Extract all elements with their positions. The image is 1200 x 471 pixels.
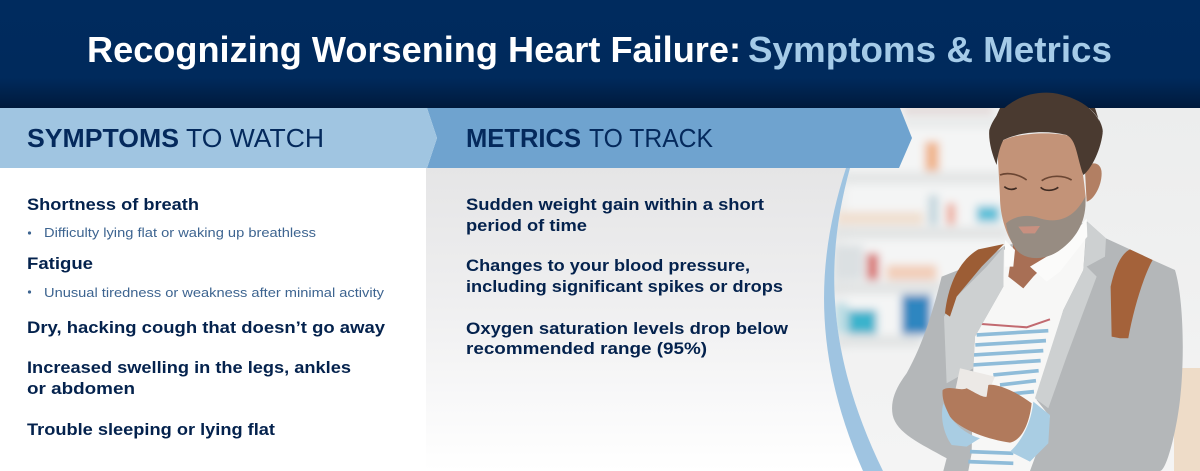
man: ear [1085,163,1102,202]
heading: symptoms to watch: SYMPTOMS [27,123,179,153]
man: backpack straps [945,244,1153,338]
man: beard [1006,197,1086,258]
metrics list: including significant spikes or drops [466,277,783,296]
title: Recognizing Worsening Heart Failure: [87,29,741,70]
man: box [955,368,995,400]
man: jacket [892,222,1183,471]
man: collar [1005,218,1087,282]
man: neck [1008,243,1060,288]
symptoms list: Shortness of breath [27,195,199,214]
metrics list: period of time [466,216,587,235]
symptoms list: Dry, hacking cough that doesn’t go away [27,318,386,337]
man: right cuff [1010,402,1050,462]
man: hair [989,92,1103,175]
metrics list: recommended range (95%) [466,339,707,358]
man: eyes and brows [1000,174,1072,190]
title: Symptoms & Metrics [748,29,1112,70]
heading: metrics to track: TO TRACK [589,123,714,153]
panel: metrics background [426,168,886,471]
metrics list: Changes to your blood pressure, [466,256,750,275]
man: mouth [1018,226,1040,233]
symptoms list: or abdomen [27,379,135,398]
heading: symptoms to watch: TO WATCH [186,123,324,153]
man: hair overlapping header [990,93,1103,133]
man: hand [942,385,1032,443]
curved accent [824,168,883,471]
photo: wooden counter [1174,368,1200,471]
symptoms list: Unusual tiredness or weakness after minimal activity [44,285,385,300]
symptoms list [27,195,386,439]
man: face [997,133,1086,257]
man: striped shirt [968,319,1050,463]
heading: metrics to track: METRICS [466,123,581,153]
title [87,29,1112,70]
metrics list: Oxygen saturation levels drop below [466,319,789,338]
banner: symptoms to watch [0,108,437,168]
man: left cuff [942,403,980,447]
man: lapels [944,222,1106,408]
header band [0,0,1200,108]
banner: metrics to track [427,108,912,168]
symptoms list: Trouble sleeping or lying flat [27,420,275,439]
man: shirt [968,223,1087,471]
symptoms list: Increased swelling in the legs, ankles [27,358,351,377]
metrics list [466,195,789,358]
metrics list: Sudden weight gain within a short [466,195,764,214]
photo: man [892,92,1183,471]
symptoms list: Fatigue [27,254,93,273]
symptoms list: Difficulty lying flat or waking up breathless [44,225,317,240]
photo: pharmacy background [820,108,1200,471]
